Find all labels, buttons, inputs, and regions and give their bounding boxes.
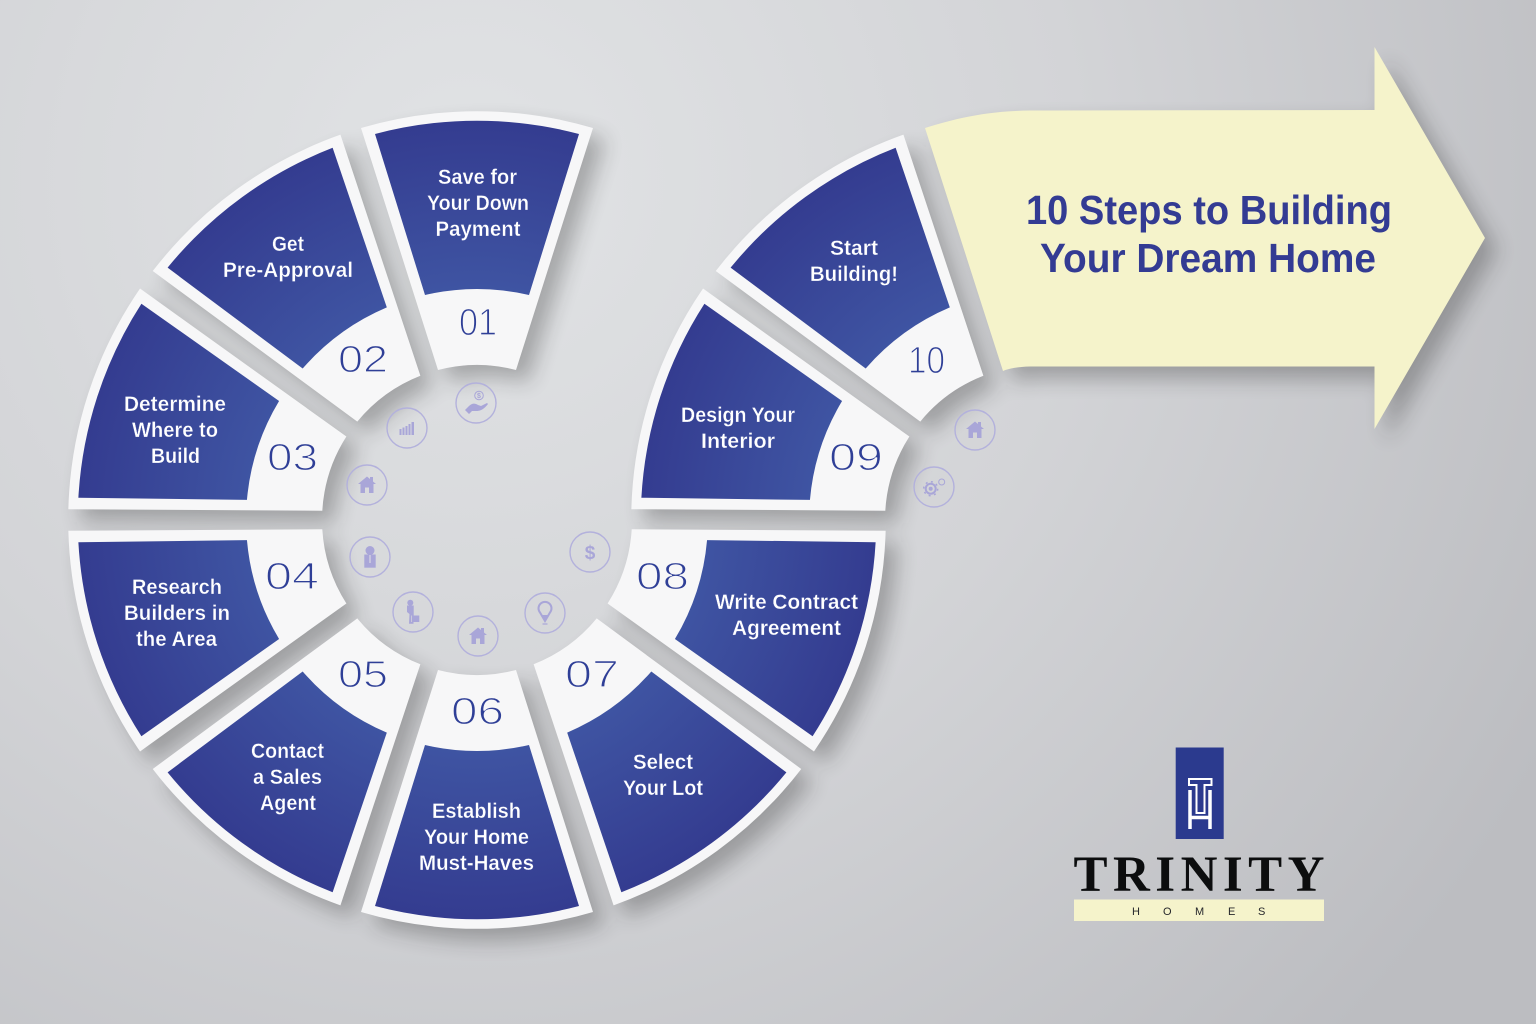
title: [1026, 187, 1392, 281]
label 03: Determine: [124, 393, 226, 416]
arrow banner: [925, 47, 1485, 429]
label 09: Interior: [701, 430, 775, 453]
label 03: [124, 393, 226, 468]
label 07: Your Lot: [623, 777, 703, 800]
icon: dollar: [570, 532, 610, 572]
label 03: Where to: [132, 419, 218, 442]
icon: dollar: $: [585, 543, 596, 564]
label 06: Must-Haves: [419, 852, 534, 875]
icon: hand holding coin: $: [477, 393, 481, 400]
logo tagline bar: [1074, 900, 1324, 921]
label 07: Select: [633, 751, 693, 774]
segment shape 03: [52, 283, 370, 584]
arrow shape: [925, 47, 1485, 429]
segment shape 05: [143, 573, 483, 919]
panel: step 03 Determine Where to Build: [52, 283, 370, 584]
label 05: a Sales: [253, 766, 322, 789]
label 01: Your Down: [427, 192, 529, 215]
panel: step 08 Write Contract Agreement: [584, 456, 902, 757]
label 04: Research: [132, 576, 222, 599]
segment shape 06: [361, 670, 593, 929]
label 03: Build: [151, 445, 200, 468]
segment shape 07: [471, 573, 811, 919]
label 05: [251, 740, 324, 815]
label 06: Establish: [432, 800, 521, 823]
label 08: Write Contract: [715, 591, 858, 614]
segment shape 09: [615, 283, 933, 584]
label 06: [419, 800, 534, 875]
label 04: the Area: [136, 628, 217, 651]
label 04: Builders in: [124, 602, 230, 625]
label 08: Agreement: [732, 617, 841, 640]
segment shape 01: [361, 111, 593, 370]
panel: step 05 Contact a Sales Agent: [143, 573, 483, 919]
number 09: 09: [829, 437, 883, 479]
label 06: Your Home: [424, 826, 529, 849]
label 09: [681, 404, 795, 453]
label 10: Building!: [810, 263, 898, 286]
label 02: Get: [272, 233, 304, 256]
label 07: [623, 751, 703, 800]
panel: step 09 Design Your Interior: [615, 283, 933, 584]
label 05: Contact: [251, 740, 324, 763]
icon: gears: [914, 467, 954, 507]
number 03: 03: [267, 437, 318, 479]
icon: person with briefcase: [393, 592, 433, 632]
panel: step 06 Establish Your Home Must-Haves: [361, 670, 593, 929]
icon: bar chart: [387, 408, 427, 448]
label 10: Start: [830, 237, 878, 260]
logo mark: [1176, 748, 1224, 839]
icon: house 06: [458, 616, 498, 656]
segment shape 08: [584, 456, 902, 757]
label 10: [810, 237, 898, 286]
panel: step 01 Save for Your Down Payment: [361, 111, 593, 370]
label 08: [715, 591, 858, 640]
label 04: [124, 576, 230, 651]
logo tagline bar: HOMES: [1132, 906, 1265, 918]
number 02: 02: [338, 339, 388, 381]
number 07: 07: [565, 654, 619, 696]
label 05: Agent: [260, 792, 316, 815]
number 06: 06: [451, 691, 504, 733]
number 01: 01: [459, 302, 497, 344]
label 01: Payment: [436, 218, 520, 241]
number 04: 04: [265, 556, 319, 598]
icon: house 03: [347, 465, 387, 505]
label 02: Pre-Approval: [223, 259, 353, 282]
title: 10 Steps to Building: [1026, 187, 1392, 233]
panel: step 04 Research Builders in the Area: [52, 456, 370, 757]
panel: step 02 Get Pre-Approval: [143, 121, 483, 467]
icon: house 10: [955, 410, 995, 450]
number 10: 10: [908, 340, 945, 382]
segment shape 04: [52, 456, 370, 757]
label 09: Design Your: [681, 404, 795, 427]
panel: step 10 Start Building!: [706, 121, 1046, 467]
logo wordmark: TRINITY: [1074, 847, 1324, 903]
label 01: [427, 166, 529, 241]
label 02: [223, 233, 353, 282]
icon: business person: [350, 537, 390, 577]
segment shape 02: [143, 121, 483, 467]
label 01: Save for: [438, 166, 517, 189]
logo: Trinity Homes: [1074, 748, 1324, 921]
number 05: 05: [338, 654, 388, 696]
icon: location pin: [525, 593, 565, 633]
icon: hand holding coin: [456, 383, 496, 423]
panel: step 07 Select Your Lot: [471, 573, 811, 919]
title: Your Dream Home: [1040, 235, 1376, 281]
segment shape 10: [706, 121, 1046, 467]
number 08: 08: [636, 556, 689, 598]
